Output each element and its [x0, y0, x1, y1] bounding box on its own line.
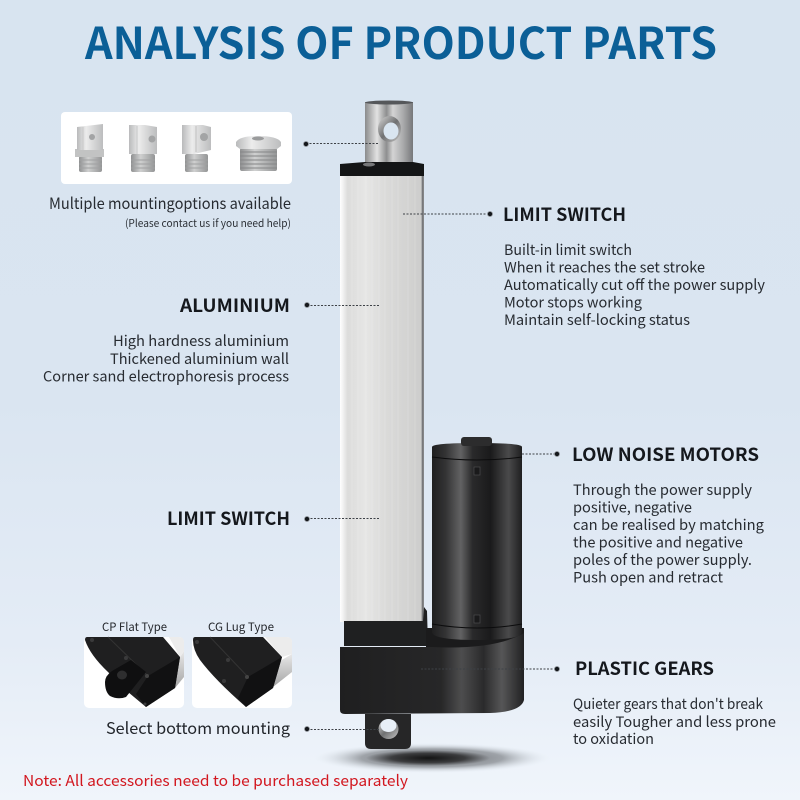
text: gears details [573, 693, 776, 749]
icon: threaded plug [236, 136, 281, 171]
text: motors details: poles of the power supply. [573, 549, 752, 570]
callout dots [304, 142, 560, 732]
text: aluminium details: Corner sand electrophoresis process [43, 366, 289, 386]
text: limit switch details: Maintain self-locking status [504, 309, 690, 330]
text: motors details: Push open and retract [573, 566, 724, 588]
text: gears details: easily Tougher and less prone [573, 711, 776, 732]
text: limit switch details: Motor stops working [504, 292, 642, 312]
heading: aluminium: ALUMINIUM [179, 292, 290, 318]
text: motors details: the positive and negative [573, 532, 743, 552]
text: gears details: to oxidation [573, 728, 654, 749]
heading: limit switch right: LIMIT SWITCH [503, 201, 626, 227]
title: ANALYSIS OF PRODUCT PARTS [84, 8, 717, 72]
icon: mounting head 2 [129, 125, 157, 172]
text: contact note: (Please contact us if you need help) [125, 216, 291, 231]
text: select bottom mounting: Select bottom mounting [106, 715, 290, 739]
bottom lug [365, 714, 411, 749]
label: CP flat type: CP Flat Type [102, 619, 167, 635]
panel: mounting options [61, 112, 292, 184]
text: limit switch details: When it reaches the set stroke [504, 256, 705, 278]
text: limit switch details [504, 239, 765, 330]
text: note: Note: All accessories need to be purchased separately [23, 770, 408, 791]
black end cap [340, 162, 424, 176]
heading: low noise motors: LOW NOISE MOTORS [572, 441, 759, 467]
text: motors details: positive, negative [573, 496, 692, 518]
icon: mounting head 1 [75, 124, 104, 172]
motor mount ring [426, 628, 524, 650]
text: aluminium details [43, 330, 289, 386]
gearbox base [340, 633, 524, 714]
text: limit switch details: Built-in limit switch [504, 239, 632, 260]
cap screw [363, 162, 375, 166]
text: aluminium details: Thickened aluminium wall [110, 348, 289, 369]
shadow under actuator [314, 743, 550, 773]
heading: limit switch left: LIMIT SWITCH [167, 505, 290, 531]
text: gears details: Quieter gears that don't break [573, 693, 763, 714]
motor body [432, 437, 522, 640]
icon: mounting head 3 [182, 125, 211, 172]
callout lines [306, 144, 557, 730]
text: motors details: can be realised by matching [573, 514, 764, 535]
black lower collar [344, 607, 428, 646]
panel: CP flat type photo [84, 637, 184, 708]
actuator illustration [340, 100, 524, 749]
text: motors details [573, 479, 764, 588]
aluminium tube [340, 176, 424, 622]
icon: top rod with eye [365, 100, 413, 164]
text: mounting options caption: Multiple mountingoptions available [49, 192, 291, 214]
text: motors details: Through the power supply [573, 479, 752, 500]
label: CG lug type: CG Lug Type [208, 619, 274, 635]
heading: plastic gears: PLASTIC GEARS [575, 655, 714, 681]
panel: CG lug type photo [192, 637, 292, 708]
text: aluminium details: High hardness aluminium [113, 330, 289, 351]
text: limit switch details: Automatically cut off the power supply [504, 274, 765, 295]
